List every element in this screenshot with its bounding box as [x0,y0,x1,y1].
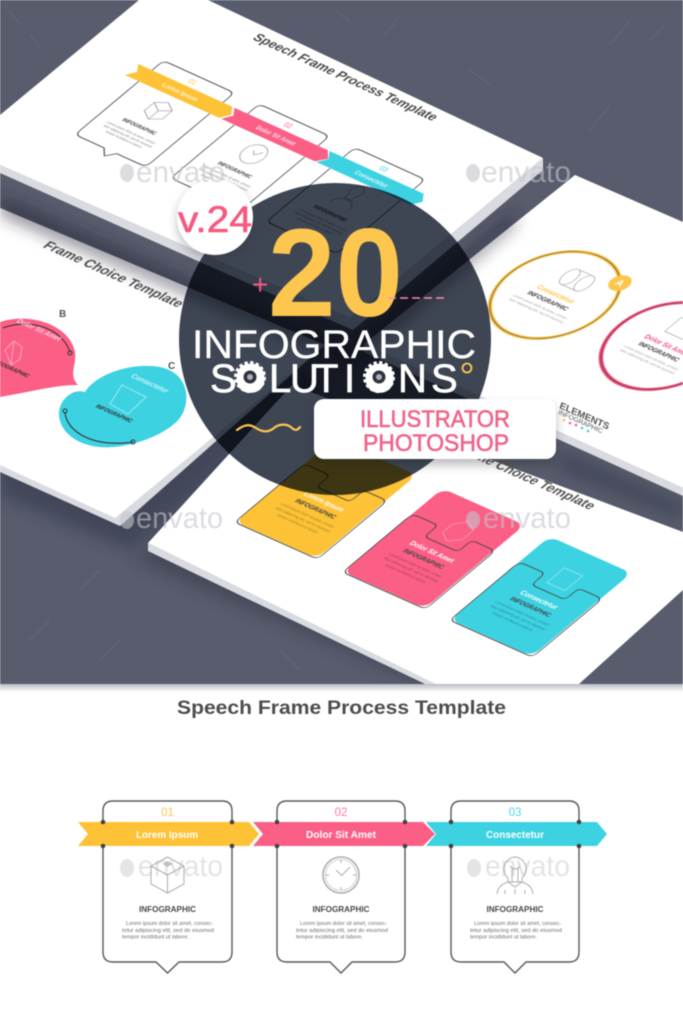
skewed body copy: Lorem ipsum dolor sit amet, consec- [201,164,254,189]
pink dashes [388,297,445,299]
body copy step 1 [122,921,214,940]
yellow choice card: tetur adipiscing elit, sed do eiusmod [274,506,332,533]
callout: Illustrator Photoshop [314,399,556,465]
step numbers [161,807,521,819]
Elements Infographic logo: ELEMENTS [558,401,611,433]
slide title: Frame Choice Template: Frame Choice Template [40,239,188,310]
pink circle option B [574,287,683,405]
process step 1 frame [103,801,232,973]
skewed ribbon labels: Lorem Ipsum [159,82,200,103]
body copy step 3 [470,921,562,940]
skewed ribbon cyan [316,151,429,207]
yellow circle option A: tetur adipiscing elit, sed do eiusmod [508,297,565,324]
panel: right slide, circle options [364,175,683,520]
yellow squiggle [237,425,300,431]
gear 2 [365,363,393,391]
yellow circle option A: Consectetur [534,283,578,305]
skewed body copy: tetur adipiscing elit, sed do eiusmod [198,167,249,192]
Elements Infographic logo: INFOGRAPHIC [557,409,603,435]
body copy step 2: Lorem ipsum dolor sit amet, consec- [300,921,387,927]
pink speech bubble: B [59,309,66,320]
callout: Illustrator Photoshop: ILLUSTRATOR [360,406,510,433]
heading: Solutions with gear letters: SOLUTIONS [210,357,458,401]
skewed ribbon labels: Consectetur [352,170,390,189]
skewed numbers: 01 [185,77,200,86]
cyan choice card: tetur adipiscing elit, sed do eiusmod [489,604,547,631]
cyan speech bubble: C [168,361,175,372]
body copy step 1: tetur adipiscing elit, sed do eiusmod [122,928,214,934]
ribbon: Consectetur: Consectetur [486,829,544,841]
body copy step 2: tempor incididunt ut labore. [296,934,363,940]
watermarks over mockup: envato [481,156,571,189]
body copy step 1: Lorem ipsum dolor sit amet, consec- [126,921,213,927]
section heading: Speech Frame Process Template [177,698,506,719]
yellow choice card: INFOGRAPHIC [293,498,338,521]
callout: Illustrator Photoshop: PHOTOSHOP [363,430,509,457]
gear 1 [236,363,264,391]
ribbon: Dolor Sit Amet [253,822,435,846]
skewed numbers: 03 [377,164,391,173]
cyan choice card: Consectetur [518,589,561,611]
skewed ribbon pink [221,108,335,164]
captions [139,904,544,914]
skewed frame 3 [260,148,425,259]
cyan choice card: Lorem ipsum dolor sit amet, consec- [494,600,553,627]
skewed frame 1 [69,61,234,172]
cyan choice card: tempor incididunt ut labore. [491,611,535,632]
slide title: Speech Frame Process Template [249,31,442,123]
pink circle option B: tetur adipiscing elit, sed do eiusmod [619,348,676,375]
cyan choice card [450,536,633,657]
white lower section [0,684,683,1024]
cyan speech bubble: Consectetur [128,372,172,394]
ribbon: Lorem Ipsum: Lorem Ipsum [136,829,198,841]
ribbon: Consectetur [426,822,607,846]
watermarks in lower section: envato [138,850,223,883]
watermarks over mockup: envato [483,502,571,535]
heading: Infographic: INFOGRAPHIC [192,323,476,367]
pink circle option B: INFOGRAPHIC [636,341,681,364]
slide title: Frame Choice Template: Frame Choice Template [451,441,600,512]
step numbers: 02 [335,807,347,819]
skewed numbers: 02 [281,121,295,130]
skewed ribbon labels [159,82,390,189]
icon: clock [323,857,359,893]
yellow circle option A: INFOGRAPHIC [525,290,570,313]
pink choice card: tempor incididunt ut labore. [384,563,428,584]
skewed captions: INFOGRAPHIC [311,204,349,223]
skewed body copy: tetur adipiscing elit, sed do eiusmod [102,124,153,149]
skewed captions: INFOGRAPHIC [120,118,158,137]
process step 2 frame [277,801,405,973]
ribbon: Lorem Ipsum [78,822,259,846]
cyan choice card: INFOGRAPHIC [508,596,553,619]
yellow circle option A: A [612,278,627,289]
degree ring [462,364,472,372]
pink circle option B: Lorem ipsum dolor sit amet, consec- [623,344,682,372]
yellow circle option A [463,236,647,354]
pink choice card [343,488,526,609]
number 20: 20 [268,204,403,343]
version badge [177,179,253,260]
version badge: v.24 [178,199,252,240]
skewed body copy: tempor incididunt ut labore. [200,173,239,193]
plus sign: + [252,269,268,300]
skewed ribbon labels: Dolor Sit Amet [253,125,298,147]
captions: INFOGRAPHIC [312,904,370,914]
yellow circle option A: Lorem ipsum dolor sit amet, consec- [512,293,571,321]
dark badge circle [179,183,491,495]
yellow choice card: Lorem Ipsum [301,490,348,514]
body copy step 2 [296,921,388,940]
pink choice card: tetur adipiscing elit, sed do eiusmod [382,556,440,583]
process step 3 frame [451,801,579,973]
skewed body copy: tempor incididunt ut labore. [295,217,335,236]
dark textured background [0,0,683,684]
body copy step 3: Lorem ipsum dolor sit amet, consec- [474,921,561,927]
watermarks over mockup: envato [136,502,223,535]
step numbers: 01 [161,807,174,819]
skewed ribbon yellow [125,64,238,120]
body copy step 3: tempor incididunt ut labore. [470,934,537,940]
pink choice card: Dolor Sit Amet [407,539,458,565]
body copy step 2: tetur adipiscing elit, sed do eiusmod [296,928,388,934]
skewed body copy: Lorem ipsum dolor sit amet, consec- [106,121,158,146]
skewed body copy [98,121,349,239]
captions: INFOGRAPHIC [486,904,544,914]
icon: person with light bulb [497,857,533,894]
panel: bottom slide, frame choice cards [135,385,683,684]
pink choice card: Lorem ipsum dolor sit amet, consec- [387,552,446,579]
skewed captions [120,118,349,223]
yellow choice card: Lorem ipsum dolor sit amet, consec- [279,502,338,529]
cylinder icon [555,267,599,293]
body copy step 3: tetur adipiscing elit, sed do eiusmod [470,928,562,934]
watermarks over mockup: envato [136,156,225,189]
pink speech bubble: Dolor Sit Amet [14,317,65,343]
shadow band below mockup [0,684,683,692]
watermarks over mockup [120,156,571,535]
panel: top slide, Speech Frame Process Template [0,0,543,365]
skewed frame 2 [165,104,330,215]
watermarks in lower section [120,850,570,883]
ribbon: Dolor Sit Amet: Dolor Sit Amet [306,829,376,841]
skewed body copy: tempor incididunt ut labore. [104,130,144,149]
body copy step 1: tempor incididunt ut labore. [122,934,189,940]
captions: INFOGRAPHIC [139,904,196,914]
panel: left slide, Frame Choice Template [0,208,325,550]
step numbers: 03 [509,807,521,819]
pink speech bubble [0,309,78,397]
pink choice card: INFOGRAPHIC [401,548,446,571]
yellow choice card: tempor incididunt ut labore. [276,513,320,534]
skewed captions: INFOGRAPHIC [215,161,253,180]
yellow choice card [235,438,418,559]
skewed body copy: Lorem ipsum dolor sit amet, consec- [297,208,349,233]
watermarks in lower section: envato [485,850,570,883]
icon: cube [151,857,184,893]
skewed icons [139,96,372,211]
connector dots [101,820,581,848]
skewed numbers [185,77,391,173]
skewed body copy: tetur adipiscing elit, sed do eiusmod [293,211,344,235]
cyan speech bubble: INFOGRAPHIC [93,404,134,424]
cyan speech bubble [59,361,186,447]
